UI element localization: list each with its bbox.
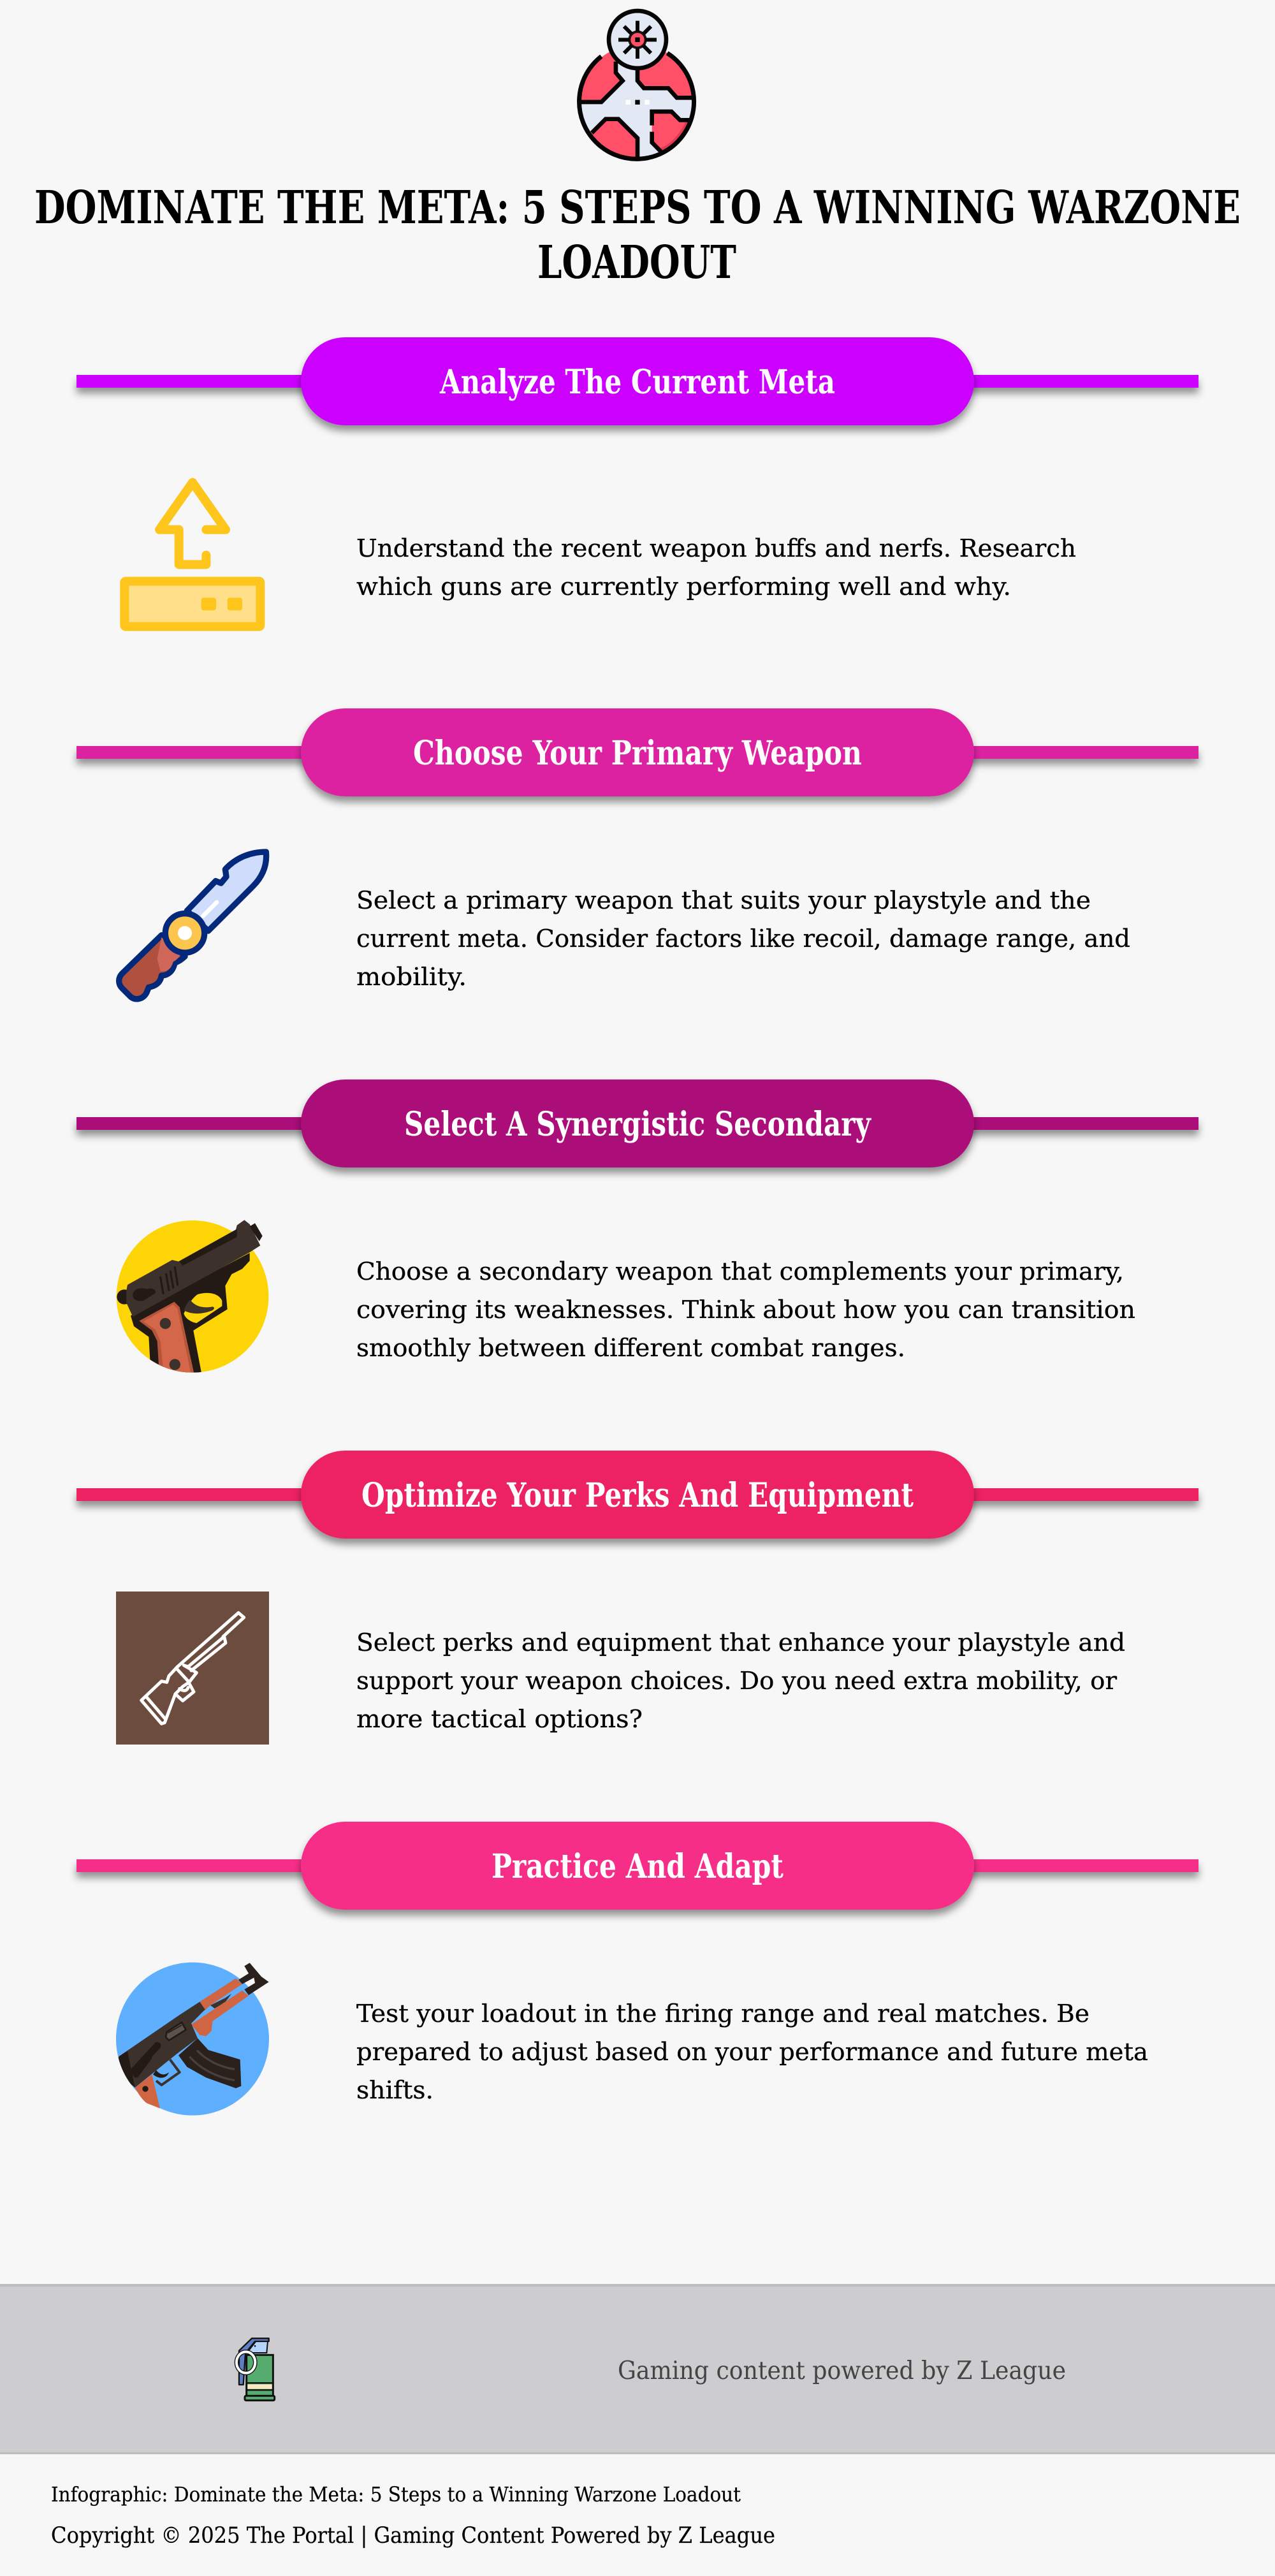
description text: Test your loadout in the firing range and real matches. Be — [356, 2000, 1089, 2028]
description text — [356, 1257, 1135, 1362]
icon: shotgun — [116, 1592, 269, 1745]
footer credits: Copyright © 2025 The Portal | Gaming Content Powered by Z League — [51, 2523, 775, 2549]
heading: select a synergistic secondary: Select A Synergistic Secondary — [404, 1105, 871, 1144]
panel: step 1 analyze the meta — [76, 337, 1198, 627]
icon: pistol — [117, 1220, 268, 1375]
description text: smoothly between different combat ranges. — [356, 1334, 905, 1362]
heading: optimize your perks and equipment: Optimize Your Perks And Equipment — [361, 1476, 914, 1515]
heading: analyze the current meta — [76, 337, 1198, 425]
description text — [356, 2000, 1148, 2104]
heading: analyze the current meta: Analyze The Current Meta — [439, 363, 835, 402]
description text: covering its weaknesses. Think about how you can transition — [356, 1296, 1135, 1324]
description text — [356, 886, 1130, 991]
description text: Understand the recent weapon buffs and nerfs. Research — [356, 534, 1076, 562]
title — [34, 180, 1241, 289]
heading: select a synergistic secondary — [76, 1079, 1198, 1167]
heading: practice and adapt: Practice And Adapt — [492, 1847, 783, 1886]
description text: Select a primary weapon that suits your playstyle and the — [356, 886, 1091, 914]
sponsor text: Gaming content powered by Z League — [618, 2357, 1066, 2385]
icon: knife — [119, 852, 266, 999]
description text: Select perks and equipment that enhance your playstyle and — [356, 1628, 1125, 1657]
footer credits: Infographic: Dominate the Meta: 5 Steps to a Winning Warzone Loadout — [51, 2482, 741, 2506]
panel: step 4 perks and equipment — [76, 1451, 1198, 1745]
description text — [356, 1628, 1125, 1733]
heading: choose your primary weapon — [76, 708, 1198, 796]
description text: current meta. Consider factors like recoil, damage range, and — [356, 925, 1130, 953]
description text: mobility. — [356, 963, 467, 991]
title: LOADOUT — [537, 235, 736, 289]
description text: more tactical options? — [356, 1705, 643, 1733]
icon: globe with virus — [578, 11, 697, 161]
icon: assault rifle — [115, 1963, 269, 2116]
heading: optimize your perks and equipment — [76, 1451, 1198, 1539]
panel: step 2 primary weapon — [76, 708, 1198, 999]
panel: sponsor band — [0, 2284, 1275, 2454]
panel: step 3 secondary — [76, 1079, 1198, 1375]
panel: step 5 practice and adapt — [76, 1822, 1198, 2116]
heading: practice and adapt — [76, 1822, 1198, 1910]
description text: Choose a secondary weapon that complements your primary, — [356, 1257, 1124, 1285]
icon: grenade — [237, 2338, 275, 2401]
description text: support your weapon choices. Do you need extra mobility, or — [356, 1667, 1118, 1695]
icon: upload arrow — [124, 483, 260, 627]
heading: choose your primary weapon: Choose Your Primary Weapon — [413, 734, 862, 773]
description text: which guns are currently performing well and why. — [356, 573, 1011, 601]
description text: shifts. — [356, 2076, 433, 2104]
footer credits — [51, 2482, 775, 2549]
description text: prepared to adjust based on your performance and future meta — [356, 2038, 1148, 2066]
description text — [356, 534, 1076, 601]
